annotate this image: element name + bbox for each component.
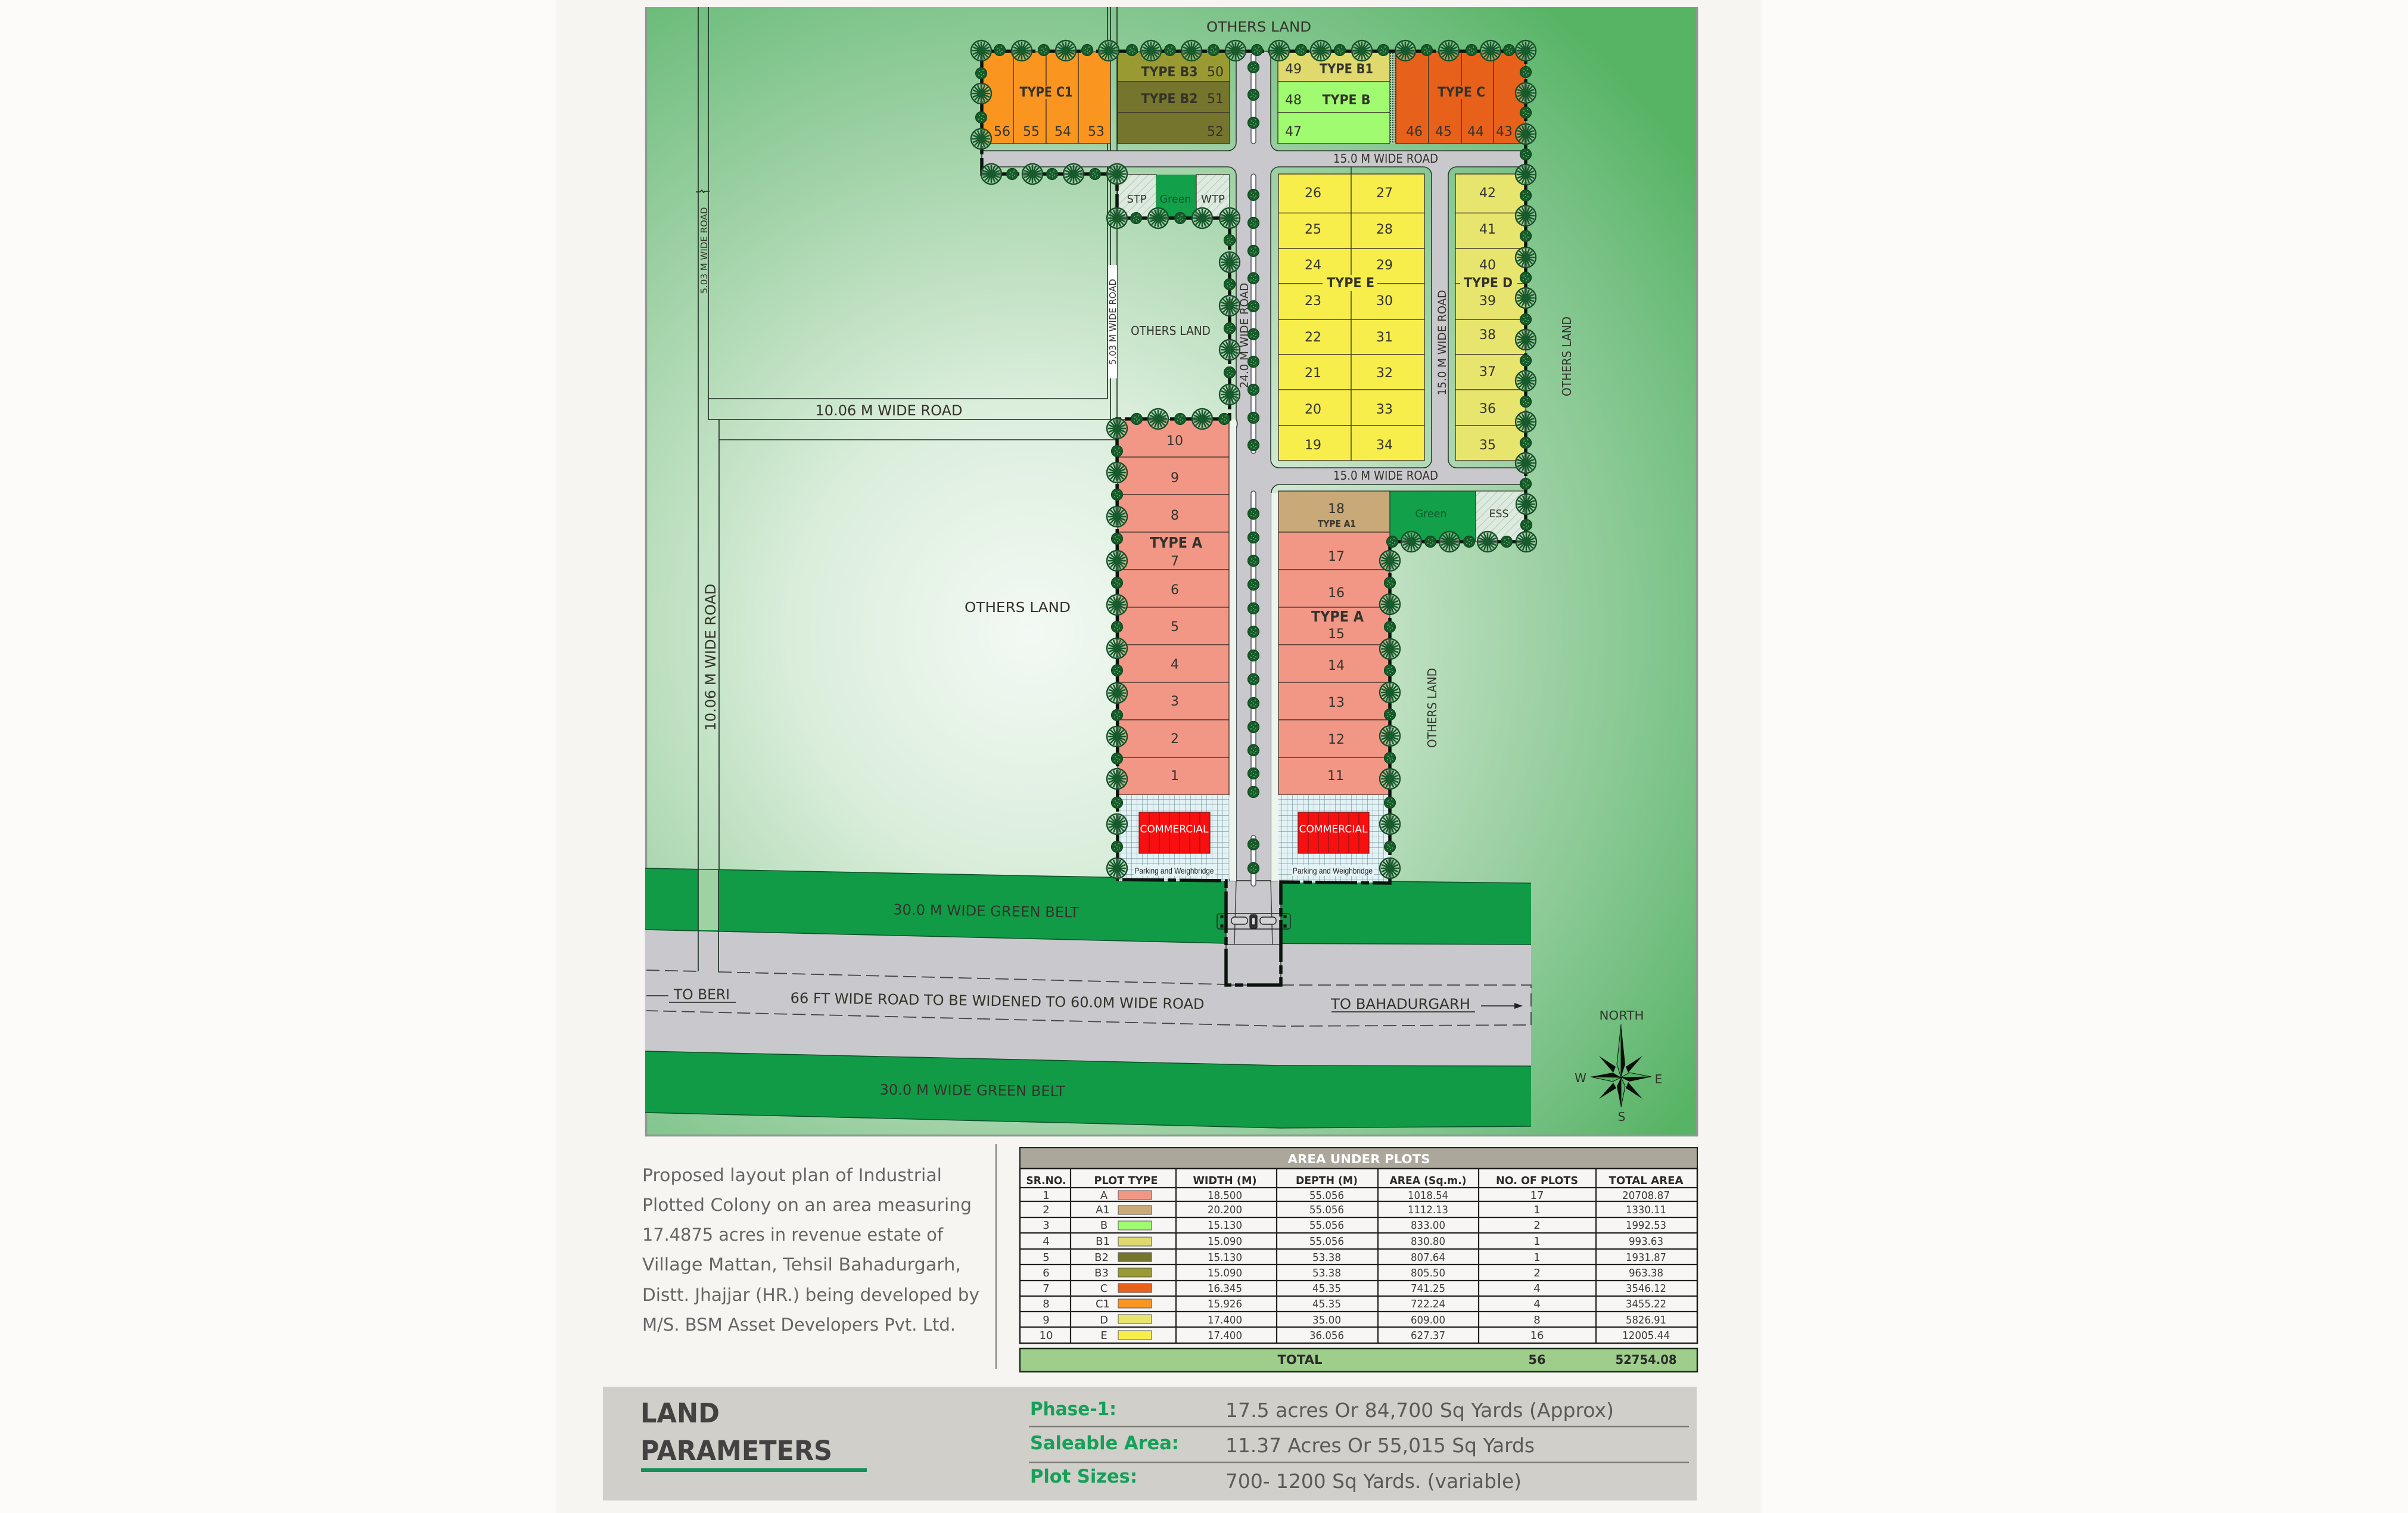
road widening dashed lines xyxy=(646,970,1531,1026)
plots: type A left column: 9 xyxy=(1171,471,1179,486)
lower green belt xyxy=(645,1051,1531,1128)
table row 6: 805.50 xyxy=(1411,1267,1445,1279)
plot sizes row: 700- 1200 Sq Yards. (variable) xyxy=(1225,1469,1522,1493)
table row 1 xyxy=(1043,1189,1670,1202)
plots: type A right column xyxy=(1278,532,1390,795)
plots: type C1: 55 xyxy=(1023,125,1040,139)
map land background xyxy=(645,7,1698,1136)
commercial and parking zone right xyxy=(1278,795,1390,883)
plots: type C: 44 xyxy=(1467,125,1484,139)
table row 7: 7 xyxy=(1043,1282,1050,1295)
plots: type E xyxy=(1278,167,1424,461)
project description text: Proposed layout plan of Industrial xyxy=(642,1165,942,1185)
entrance gate xyxy=(1217,914,1290,929)
project description text: Plotted Colony on an area measuring xyxy=(642,1195,972,1215)
highway road xyxy=(645,930,1531,1066)
plot: type A1: 18 xyxy=(1328,502,1345,517)
table row 2: 1112.13 xyxy=(1408,1204,1448,1216)
table row 1: 1018.54 xyxy=(1408,1189,1448,1202)
page background xyxy=(556,0,1762,1513)
boundary trees xyxy=(971,41,1536,878)
table row 1: 20708.87 xyxy=(1622,1189,1670,1202)
project description text: Village Mattan, Tehsil Bahadurgarh, xyxy=(642,1254,961,1275)
plots: type D: 38 xyxy=(1479,328,1496,343)
table row 6: 2 xyxy=(1533,1267,1541,1279)
plots: type D: 35 xyxy=(1479,438,1496,453)
saleable area row xyxy=(1029,1433,1689,1462)
plots: type D: 42 xyxy=(1479,186,1496,201)
entrance flare lines xyxy=(1226,881,1281,945)
project description text: 17.4875 acres in revenue estate of xyxy=(642,1225,944,1245)
icon: compass rose: E xyxy=(1655,1072,1662,1086)
table column headers: WIDTH (M) xyxy=(1193,1175,1257,1187)
plots: type A left column: 2 xyxy=(1171,732,1179,747)
table row 3 xyxy=(1043,1219,1666,1232)
table row 10: 12005.44 xyxy=(1622,1329,1670,1342)
plots: type A right column: 17 xyxy=(1328,549,1345,564)
table row 4: B1 xyxy=(1096,1235,1110,1248)
table row 6: 15.090 xyxy=(1208,1267,1242,1279)
commercial and parking zone right: COMMERCIAL xyxy=(1299,824,1368,835)
road and land labels: OTHERS LAND xyxy=(965,600,1071,616)
plots: type E: 28 xyxy=(1376,222,1393,237)
table total row: TOTAL xyxy=(1277,1353,1323,1367)
table row 5: B2 xyxy=(1094,1251,1109,1264)
road and land labels: OTHERS LAND xyxy=(1560,316,1574,396)
table row 3: 15.130 xyxy=(1208,1219,1242,1232)
panel background xyxy=(603,1387,1697,1500)
table row 7: 4 xyxy=(1533,1282,1541,1295)
plots: type E: 21 xyxy=(1305,366,1321,381)
table row 2: 1330.11 xyxy=(1626,1204,1666,1216)
table row 7: 741.25 xyxy=(1411,1282,1445,1295)
commercial and parking zone right: Parking and Weighbridge xyxy=(1293,866,1373,875)
table row 4: 55.056 xyxy=(1309,1235,1344,1248)
table total row: 56 xyxy=(1528,1353,1546,1367)
plots: type B1 and B: 49 xyxy=(1285,62,1302,77)
table row 8 xyxy=(1043,1298,1666,1310)
plots: type C1: 54 xyxy=(1054,125,1071,139)
table row 5: 1931.87 xyxy=(1626,1251,1666,1264)
phase row: 17.5 acres Or 84,700 Sq Yards (Approx) xyxy=(1225,1399,1614,1422)
plots: type C: 43 xyxy=(1496,125,1513,139)
table row 5: 5 xyxy=(1043,1251,1050,1264)
utilities: STP, green, WTP: WTP xyxy=(1201,193,1225,206)
site boundary xyxy=(982,51,1526,985)
table row 5: 1 xyxy=(1533,1251,1541,1264)
table row 10: 10 xyxy=(1040,1329,1053,1342)
internal road network xyxy=(982,51,1526,881)
table row 3: 55.056 xyxy=(1309,1219,1344,1232)
table row 9: 35.00 xyxy=(1312,1314,1341,1326)
phase row xyxy=(1029,1399,1689,1427)
table row 6: 53.38 xyxy=(1312,1267,1341,1279)
table row 10: 627.37 xyxy=(1411,1329,1445,1342)
table column headers: PLOT TYPE xyxy=(1094,1175,1158,1187)
plots: type D: 41 xyxy=(1479,222,1496,237)
plots: type B3 and B2: 50 xyxy=(1207,65,1224,80)
plots: type B3 and B2: 52 xyxy=(1207,125,1224,139)
table row 6 xyxy=(1043,1267,1663,1279)
table row 8: 4 xyxy=(1533,1298,1541,1310)
to beri direction: TO BERI xyxy=(673,986,730,1003)
table total row xyxy=(1020,1349,1697,1372)
plots: type E: TYPE E xyxy=(1327,276,1374,291)
upper green belt xyxy=(645,868,1531,945)
plots: type C: 46 xyxy=(1406,125,1423,139)
table row 7: 16.345 xyxy=(1208,1282,1242,1295)
plots: type B3 and B2: TYPE B3 xyxy=(1141,65,1197,80)
plots: type E: 32 xyxy=(1376,366,1393,381)
saleable area row: Saleable Area: xyxy=(1030,1433,1179,1454)
table row 8: C1 xyxy=(1096,1298,1110,1310)
table row 7 xyxy=(1043,1282,1666,1295)
table row 5: 15.130 xyxy=(1208,1251,1242,1264)
road and land labels: 15.0 M WIDE ROAD xyxy=(1436,290,1449,396)
road and land labels: 10.06 M WIDE ROAD xyxy=(702,584,719,731)
map edge strokes xyxy=(646,7,1697,1136)
plots: type B1 and B: TYPE B1 xyxy=(1320,62,1373,77)
commercial and parking zone left: COMMERCIAL xyxy=(1140,824,1209,835)
table row 3: 1992.53 xyxy=(1626,1219,1666,1232)
plots: type A right column: TYPE A xyxy=(1311,608,1364,625)
plots: type A right column: 15 xyxy=(1328,627,1345,642)
icon: compass rose: NORTH xyxy=(1599,1008,1644,1023)
green plot and ESS xyxy=(1390,491,1526,542)
plots: type E: 26 xyxy=(1305,186,1321,201)
table row 10: 16 xyxy=(1530,1329,1544,1342)
utilities: STP, green, WTP: Green xyxy=(1159,193,1191,206)
utilities: STP, green, WTP xyxy=(1118,175,1230,218)
table column headers: AREA (Sq.m.) xyxy=(1389,1175,1467,1187)
road and land labels: 24.0 M WIDE ROAD xyxy=(1238,282,1251,389)
table total row: 52754.08 xyxy=(1616,1353,1676,1367)
plots: type D: 40 xyxy=(1479,258,1496,273)
table row 8: 15.926 xyxy=(1208,1298,1242,1310)
table column headers: TOTAL AREA xyxy=(1609,1175,1684,1187)
table: area under plots xyxy=(1020,1148,1697,1372)
plots: type A left column: TYPE A xyxy=(1150,534,1203,551)
plots: type A left column: 5 xyxy=(1171,620,1179,635)
light verges xyxy=(1230,420,1278,881)
plots: type E: 20 xyxy=(1305,402,1321,417)
table row 7: C xyxy=(1100,1282,1107,1295)
plots: type A left column: 3 xyxy=(1171,694,1179,709)
table column headers: NO. OF PLOTS xyxy=(1496,1175,1578,1187)
project description text: M/S. BSM Asset Developers Pvt. Ltd. xyxy=(642,1315,956,1335)
table row 9 xyxy=(1043,1314,1666,1326)
plots: type A right column: 12 xyxy=(1328,732,1345,747)
table row 1: 55.056 xyxy=(1309,1189,1344,1202)
table column headers: DEPTH (M) xyxy=(1296,1175,1358,1187)
table row 9: 9 xyxy=(1043,1314,1050,1326)
green plot and ESS: ESS xyxy=(1489,508,1508,520)
table row 2: A1 xyxy=(1096,1204,1110,1216)
plots: type A left column xyxy=(1118,420,1229,795)
plots: type A left column: 4 xyxy=(1171,657,1179,672)
heading: LAND xyxy=(640,1397,720,1429)
plots: type A left column: 7 xyxy=(1171,554,1179,569)
plots: type E: 31 xyxy=(1376,330,1393,345)
table row 9: 609.00 xyxy=(1411,1314,1445,1326)
plots: type E: 24 xyxy=(1305,258,1321,273)
plots: type A left column: 6 xyxy=(1171,583,1179,598)
table row 6: B3 xyxy=(1094,1267,1109,1279)
table row 4: 1 xyxy=(1533,1235,1541,1248)
panel: site layout map xyxy=(645,7,1698,1136)
plots: type E: 19 xyxy=(1305,438,1321,453)
plots: type A left column: 8 xyxy=(1171,508,1179,523)
plots: type E: 27 xyxy=(1376,186,1393,201)
plots: type B1 and B xyxy=(1278,52,1396,144)
vertical divider xyxy=(995,1144,997,1369)
road and land labels: 15.0 M WIDE ROAD xyxy=(1333,468,1438,483)
table row 3: 2 xyxy=(1533,1219,1541,1232)
table row 4: 4 xyxy=(1043,1235,1050,1248)
plot sizes row xyxy=(1030,1466,1522,1493)
heading xyxy=(640,1397,867,1472)
green belt edge lines xyxy=(645,868,1531,1128)
plots: type C1: 56 xyxy=(994,125,1010,139)
plots: type D: TYPE D xyxy=(1464,276,1513,291)
plots: type E: 30 xyxy=(1376,294,1393,309)
icon: compass rose: S xyxy=(1618,1110,1625,1124)
table row 10: 36.056 xyxy=(1309,1329,1344,1342)
table row 9: 8 xyxy=(1533,1314,1541,1326)
plots: type C1: TYPE C1 xyxy=(1020,85,1072,100)
plots: type B1 and B: 47 xyxy=(1285,125,1302,139)
table row 10: E xyxy=(1100,1329,1107,1342)
plots: type E: 25 xyxy=(1305,222,1321,237)
table row 3: B xyxy=(1100,1219,1107,1232)
table row 4 xyxy=(1043,1235,1663,1248)
plots: type A right column: 11 xyxy=(1327,769,1344,784)
table row 3: 833.00 xyxy=(1411,1219,1445,1232)
table row 8: 722.24 xyxy=(1411,1298,1445,1310)
plots: type C: 45 xyxy=(1435,125,1452,139)
table row 5: 53.38 xyxy=(1312,1251,1341,1264)
table row 5 xyxy=(1043,1251,1666,1264)
plot: type A1 xyxy=(1278,491,1390,532)
table row 1: 18.500 xyxy=(1208,1189,1242,1202)
plots: type C: TYPE C xyxy=(1438,85,1485,100)
table row 4: 993.63 xyxy=(1629,1235,1663,1248)
plots: type A left column: 10 xyxy=(1166,434,1183,449)
road and land labels xyxy=(699,20,1574,1099)
table row 5: 807.64 xyxy=(1411,1251,1445,1264)
plots: type D: 39 xyxy=(1479,294,1496,309)
project description text: Distt. Jhajjar (HR.) being developed by xyxy=(642,1285,979,1305)
saleable area row: 11.37 Acres Or 55,015 Sq Yards xyxy=(1225,1434,1535,1457)
road and land labels: 5.03 M WIDE ROAD xyxy=(699,207,710,293)
table row 2: 20.200 xyxy=(1208,1204,1242,1216)
table row 1: 1 xyxy=(1043,1189,1050,1202)
plots: type E: 29 xyxy=(1376,258,1393,273)
plots: type E: 22 xyxy=(1305,330,1321,345)
entrance road xyxy=(1226,881,1281,985)
phase row: Phase-1: xyxy=(1030,1399,1116,1420)
road and land labels: 30.0 M WIDE GREEN BELT xyxy=(879,1082,1065,1099)
road and land labels: OTHERS LAND xyxy=(1131,324,1211,338)
table row 9: 5826.91 xyxy=(1626,1314,1666,1326)
table row 9: D xyxy=(1100,1314,1108,1326)
median trees xyxy=(1247,62,1259,874)
plots: type D: 36 xyxy=(1479,402,1496,417)
table row 8: 3455.22 xyxy=(1626,1298,1666,1310)
plot: type A1: TYPE A1 xyxy=(1318,518,1356,529)
plots: type E: 34 xyxy=(1376,438,1393,453)
table grid xyxy=(1020,1169,1697,1343)
plots: type C xyxy=(1396,52,1526,144)
plots: type C1 xyxy=(982,52,1110,144)
road and land labels: OTHERS LAND xyxy=(1206,20,1311,35)
access road lines over highway xyxy=(698,869,718,973)
plots: type B3 and B2 xyxy=(1118,52,1230,144)
plots: type D xyxy=(1455,174,1526,461)
table row 4: 15.090 xyxy=(1208,1235,1242,1248)
plots: type E: 33 xyxy=(1376,402,1393,417)
plot sizes row: Plot Sizes: xyxy=(1030,1466,1137,1487)
icon: compass rose: W xyxy=(1575,1071,1586,1085)
table row 10: 17.400 xyxy=(1208,1329,1242,1342)
road and land labels: 66 FT WIDE ROAD TO BE WIDENED TO 60.0M WIDE ROAD xyxy=(790,990,1205,1012)
plots: type A left column: 1 xyxy=(1171,769,1179,784)
table row 10 xyxy=(1040,1329,1670,1342)
table row 2: 1 xyxy=(1533,1204,1541,1216)
panel: land parameters xyxy=(603,1387,1697,1500)
access road strip across green belt xyxy=(698,869,718,930)
plots: type B1 and B: TYPE B xyxy=(1323,93,1370,108)
table column headers: SR.NO. xyxy=(1026,1175,1066,1187)
table title bar: AREA UNDER PLOTS xyxy=(1288,1152,1430,1166)
table row 7: 3546.12 xyxy=(1626,1282,1666,1295)
road and land labels: 15.0 M WIDE ROAD xyxy=(1333,151,1438,166)
plots: type A right column: 14 xyxy=(1328,658,1345,673)
neighbouring access road outlines xyxy=(696,7,1117,971)
table row 9: 17.400 xyxy=(1208,1314,1242,1326)
road and land labels: OTHERS LAND xyxy=(1425,668,1439,748)
table row 8: 45.35 xyxy=(1312,1298,1341,1310)
table column headers xyxy=(1026,1175,1684,1187)
table row 6: 963.38 xyxy=(1629,1267,1663,1279)
heading: PARAMETERS xyxy=(640,1435,832,1467)
table title bar xyxy=(1020,1148,1697,1169)
plots: type B3 and B2: 51 xyxy=(1207,92,1224,107)
utilities: STP, green, WTP: STP xyxy=(1127,193,1147,206)
plots: type C1: 53 xyxy=(1088,125,1105,139)
plots: type B1 and B: 48 xyxy=(1285,93,1302,108)
plots: type D: 37 xyxy=(1479,365,1496,380)
road and land labels: 5.03 M WIDE ROAD xyxy=(1107,279,1118,365)
commercial and parking zone left xyxy=(1118,795,1229,881)
table row 2: 2 xyxy=(1043,1204,1050,1216)
road and land labels: 30.0 M WIDE GREEN BELT xyxy=(893,901,1079,921)
to bahadurgarh direction: TO BAHADURGARH xyxy=(1330,996,1470,1012)
medians xyxy=(1251,54,1256,886)
plots: type B3 and B2: TYPE B2 xyxy=(1141,92,1197,107)
table row 6: 6 xyxy=(1043,1267,1050,1279)
plots: type A right column: 13 xyxy=(1328,695,1345,710)
icon: compass rose xyxy=(1575,1008,1662,1124)
commercial and parking zone left: Parking and Weighbridge xyxy=(1134,866,1214,875)
table row 3: 3 xyxy=(1043,1219,1050,1232)
table row 1: 17 xyxy=(1530,1189,1544,1202)
road and land labels: 10.06 M WIDE ROAD xyxy=(815,402,963,419)
table row 2: 55.056 xyxy=(1309,1204,1344,1216)
plots: type A right column: 16 xyxy=(1328,586,1345,601)
plots: type E: 23 xyxy=(1305,294,1321,309)
table row 8: 8 xyxy=(1043,1298,1050,1310)
project description text xyxy=(642,1165,979,1335)
table row 2 xyxy=(1043,1204,1666,1216)
table row 7: 45.35 xyxy=(1312,1282,1341,1295)
table row 1: A xyxy=(1100,1189,1108,1202)
table row 4: 830.80 xyxy=(1411,1235,1445,1248)
to beri direction xyxy=(646,986,736,1003)
green plot and ESS: Green xyxy=(1415,508,1446,520)
